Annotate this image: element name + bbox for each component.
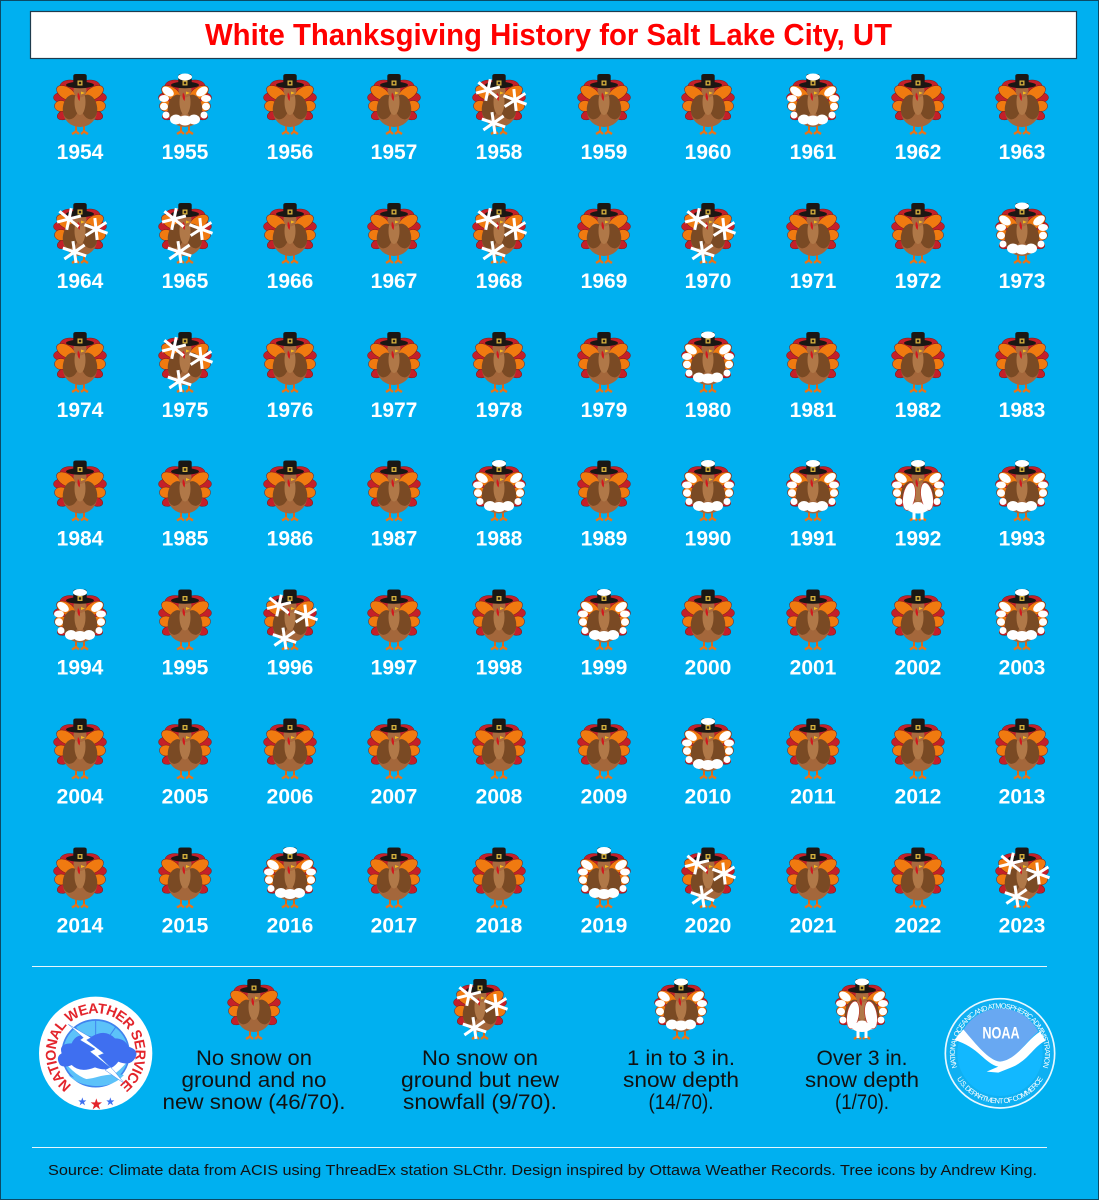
logo: NOAA: U.S. DEPARTMENT OF COMMERCE (958, 1076, 1043, 1104)
year 1961 (786, 74, 840, 164)
year 1969 (578, 203, 630, 293)
year 2012 (892, 718, 944, 808)
year 1974: 1974 (57, 399, 104, 422)
year 1955: 1955 (162, 141, 209, 164)
year 1997 (368, 590, 420, 680)
year 1987: 1987 (371, 528, 417, 550)
year 2002: 2002 (895, 656, 941, 680)
year 1960: 1960 (685, 141, 731, 164)
year 2015: 2015 (162, 914, 209, 938)
year 2003: 2003 (999, 656, 1045, 680)
year 1957: 1957 (371, 141, 417, 164)
year 2001 (786, 590, 840, 680)
year 1996 (264, 590, 318, 680)
logo: NOAA: NOAA (982, 1023, 1020, 1042)
legend: new snowfall: No snow on (422, 1047, 538, 1070)
year 1962 (892, 74, 944, 164)
year 1990: 1990 (685, 528, 731, 550)
year 2013: 2013 (999, 786, 1045, 808)
year 2004: 2004 (57, 786, 104, 808)
year 1960 (682, 74, 734, 164)
title (30, 12, 1076, 58)
year 1999: 1999 (581, 656, 627, 680)
year 1980: 1980 (685, 399, 731, 422)
year 1995: 1995 (162, 656, 209, 680)
year 1979: 1979 (581, 399, 627, 422)
source note: Source: Climate data from ACIS using ThreadEx station SLCthr. Design inspired by Ottawa Weather Records. Tree icons by Andrew King. (48, 1162, 1037, 1179)
year 1971 (786, 203, 840, 293)
year 1998 (472, 590, 526, 680)
year 1971: 1971 (790, 270, 837, 293)
year 1989 (578, 460, 630, 550)
year 1997: 1997 (371, 656, 417, 680)
year 1968 (472, 203, 527, 293)
legend: new snowfall: snowfall (9/70). (403, 1091, 557, 1114)
year 2020: 2020 (685, 914, 731, 938)
legend: over 3 inches: snow depth (805, 1069, 919, 1092)
year 1975 (158, 332, 213, 422)
year 1981: 1981 (790, 399, 837, 422)
year 1963: 1963 (999, 141, 1045, 164)
year 1980 (682, 332, 734, 422)
legend: 1 to 3 inches: snow depth (623, 1069, 739, 1092)
row 1974-1983 (54, 332, 1048, 422)
year 1979 (578, 332, 630, 422)
year 2015 (158, 848, 212, 938)
year 1975: 1975 (162, 399, 209, 422)
turkey year grid (54, 74, 1050, 938)
year 2022 (892, 848, 944, 938)
year 2013 (996, 718, 1048, 808)
year 2002 (892, 590, 944, 680)
year 1965: 1965 (162, 270, 209, 293)
year 2011 (786, 718, 840, 808)
legend: over 3 inches (805, 978, 919, 1114)
legend: no snow (162, 979, 346, 1114)
row 1964-1973 (54, 202, 1048, 293)
year 1967: 1967 (371, 270, 417, 293)
year 1958: 1958 (476, 141, 523, 164)
year 2008 (472, 718, 526, 808)
logo: NOAA (944, 998, 1056, 1109)
year 1977: 1977 (371, 399, 417, 422)
year 2009: 2009 (581, 786, 627, 808)
year 2005 (158, 718, 212, 808)
year 1983 (996, 332, 1048, 422)
year 1978: 1978 (476, 399, 523, 422)
year 2016: 2016 (267, 914, 313, 938)
year 1976: 1976 (267, 399, 313, 422)
year 1973: 1973 (999, 270, 1045, 293)
year 1970: 1970 (685, 270, 731, 293)
year 1982 (892, 332, 944, 422)
year 2018 (472, 848, 526, 938)
year 1984 (54, 460, 106, 550)
row 2004-2013 (54, 718, 1048, 808)
year 1996: 1996 (267, 656, 313, 680)
year 1994: 1994 (57, 656, 104, 680)
year 1972: 1972 (895, 270, 941, 293)
year 1954 (54, 74, 106, 164)
year 2018: 2018 (476, 914, 523, 938)
row 1954-1963 (54, 74, 1048, 164)
year 1998: 1998 (476, 656, 523, 680)
year 1969: 1969 (581, 270, 627, 293)
year 2019: 2019 (581, 914, 627, 938)
year 2017 (368, 848, 420, 938)
year 2006 (264, 718, 316, 808)
year 1999 (578, 589, 630, 680)
year 1982: 1982 (895, 399, 941, 422)
year 2016 (264, 847, 316, 938)
year 2005: 2005 (162, 786, 209, 808)
year 1992 (892, 460, 944, 550)
year 1964 (54, 203, 108, 293)
year 2008: 2008 (476, 786, 523, 808)
year 1986 (264, 460, 316, 550)
year 1962: 1962 (895, 141, 941, 164)
legend: no snow: No snow on (196, 1047, 312, 1070)
row 1994-2003 (54, 589, 1048, 680)
year 2017: 2017 (371, 914, 417, 938)
year 1985: 1985 (162, 528, 209, 550)
year 2006: 2006 (267, 786, 313, 808)
year 2001: 2001 (790, 656, 837, 680)
title: White Thanksgiving History for Salt Lake City, UT (205, 17, 892, 52)
row 1984-1993 (54, 460, 1048, 550)
year 1986: 1986 (267, 528, 313, 550)
year 1966 (264, 203, 316, 293)
year 2010 (682, 718, 734, 808)
year 1965 (158, 203, 213, 293)
legend: no snow: new snow (46/70). (162, 1091, 346, 1114)
year 2000: 2000 (685, 656, 731, 680)
year 1958 (472, 74, 527, 164)
year 1961: 1961 (790, 141, 837, 164)
year 1995 (158, 590, 212, 680)
year 1988: 1988 (476, 528, 523, 550)
logo: NOAA: NATIONAL OCEANIC AND ATMOSPHERIC ADMINISTRATION (950, 1003, 1050, 1068)
year 2019 (578, 847, 630, 938)
year 1988 (472, 460, 526, 550)
year 1991 (786, 460, 840, 550)
year 2014: 2014 (57, 914, 104, 938)
year 2007 (368, 718, 420, 808)
year 1956: 1956 (267, 141, 313, 164)
year 2014 (54, 848, 106, 938)
year 1977 (368, 332, 420, 422)
year 1993 (996, 460, 1048, 550)
year 2012: 2012 (895, 786, 941, 808)
year 1985 (158, 460, 212, 550)
year 2020 (682, 848, 736, 938)
year 2022: 2022 (895, 914, 941, 938)
year 1954: 1954 (57, 141, 104, 164)
year 1966: 1966 (267, 270, 313, 293)
year 1987 (368, 460, 420, 550)
year 1994 (54, 589, 106, 680)
legend: 1 to 3 inches (623, 978, 739, 1114)
year 1981 (786, 332, 840, 422)
year 2010: 2010 (685, 786, 731, 808)
year 2023: 2023 (999, 914, 1045, 938)
year 1974 (54, 332, 106, 422)
legend: over 3 inches: Over 3 in. (816, 1047, 908, 1070)
year 1955 (158, 74, 212, 164)
legend: new snowfall: ground but new (401, 1069, 560, 1092)
row 2014-2023 (54, 847, 1050, 938)
year 1957 (368, 74, 420, 164)
year 1970 (682, 203, 736, 293)
year 2021 (786, 848, 840, 938)
legend: over 3 inches: (1/70). (835, 1091, 889, 1114)
year 2021: 2021 (790, 914, 837, 938)
year 1992: 1992 (895, 528, 941, 550)
year 1963 (996, 74, 1048, 164)
year 2009 (578, 718, 630, 808)
year 2000 (682, 590, 734, 680)
year 1989: 1989 (581, 528, 627, 550)
year 2011: 2011 (790, 786, 836, 808)
year 1976 (264, 332, 316, 422)
year 1959: 1959 (581, 141, 627, 164)
legend: no snow: ground and no (182, 1069, 326, 1092)
year 2023 (996, 848, 1050, 938)
year 1978 (472, 332, 526, 422)
year 1967 (368, 203, 420, 293)
legend (162, 978, 919, 1114)
year 1964: 1964 (57, 270, 104, 293)
year 2003 (996, 589, 1048, 680)
year 1983: 1983 (999, 399, 1045, 422)
year 1993: 1993 (999, 528, 1045, 550)
year 2007: 2007 (371, 786, 417, 808)
year 1991: 1991 (790, 528, 837, 550)
logo: National Weather Service: NATIONAL WEATHER SERVICE (46, 1003, 146, 1092)
year 1956 (264, 74, 316, 164)
year 1968: 1968 (476, 270, 523, 293)
year 1984: 1984 (57, 528, 104, 550)
year 2004 (54, 718, 106, 808)
legend: 1 to 3 inches: 1 in to 3 in. (627, 1047, 735, 1070)
year 1959 (578, 74, 630, 164)
year 1990 (682, 460, 734, 550)
legend: 1 to 3 inches: (14/70). (648, 1091, 714, 1114)
legend: new snowfall (401, 979, 560, 1114)
year 1973 (996, 202, 1048, 293)
year 1972 (892, 203, 944, 293)
